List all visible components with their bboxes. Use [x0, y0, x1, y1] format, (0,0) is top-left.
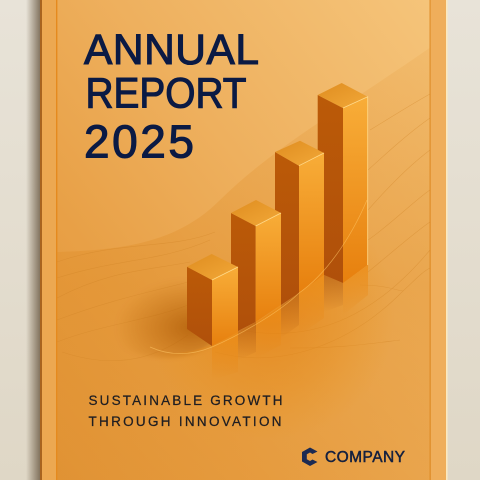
title [84, 27, 259, 168]
bar 3 [275, 141, 324, 305]
growth curve highlight [150, 200, 367, 354]
title: REPORT [86, 70, 246, 118]
tagline: SUSTAINABLE GROWTH [88, 393, 282, 408]
glossy floor [150, 245, 400, 445]
bar reflections [212, 265, 368, 380]
bar 2 [231, 200, 281, 331]
bar 1 [187, 254, 238, 346]
tagline: THROUGH INNOVATION [88, 414, 282, 429]
background swoosh [58, 48, 430, 480]
bar chart [187, 83, 368, 346]
ground shadow [103, 278, 227, 358]
company name: COMPANY [325, 449, 405, 466]
contour lines [57, 94, 430, 361]
bar 4 [318, 83, 368, 283]
icon: company logo [302, 448, 318, 466]
title: ANNUAL [84, 27, 259, 74]
tagline [88, 393, 282, 429]
title: 2025 [84, 116, 194, 168]
